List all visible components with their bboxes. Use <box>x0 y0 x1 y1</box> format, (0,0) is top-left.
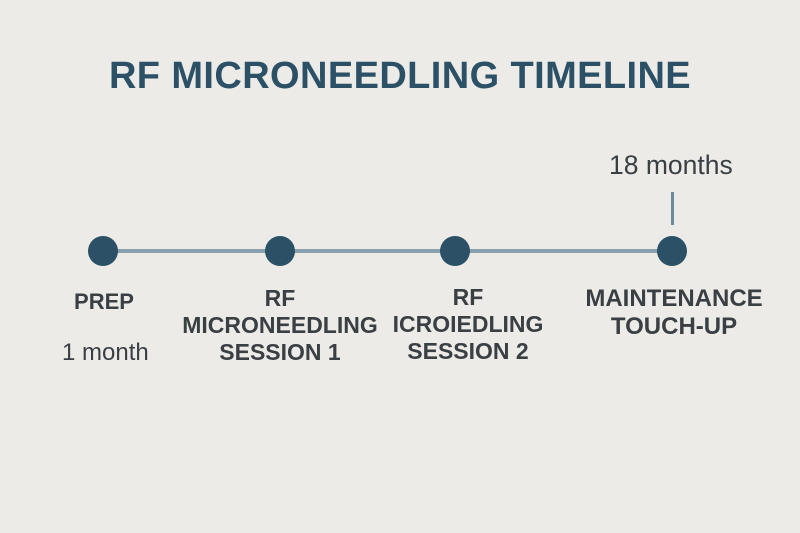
label: 1 month: 1 month <box>62 339 149 366</box>
label: session 1: RF <box>265 285 295 311</box>
dot: session 2 <box>440 236 470 266</box>
label: session 1 <box>182 285 378 365</box>
label: session 2 <box>393 284 543 364</box>
label: maintenance: MAINTENANCE <box>585 285 763 312</box>
title: RF MICRONEEDLING TIMELINE <box>109 55 691 97</box>
label: session 1: SESSION 1 <box>219 339 341 365</box>
dot: maintenance <box>657 236 687 266</box>
label: session 2: RF <box>453 284 483 310</box>
label: maintenance <box>585 285 763 340</box>
label: prep: PREP <box>74 289 134 314</box>
dot: prep <box>88 236 118 266</box>
label: maintenance: TOUCH-UP <box>611 313 737 340</box>
label: 18 months: 18 months <box>609 150 733 180</box>
label: session 1: MICRONEEDLING <box>182 312 378 338</box>
dot: session 1 <box>265 236 295 266</box>
label: session 2: SESSION 2 <box>407 338 529 364</box>
label: session 2: ICROIEDLING <box>393 311 543 337</box>
